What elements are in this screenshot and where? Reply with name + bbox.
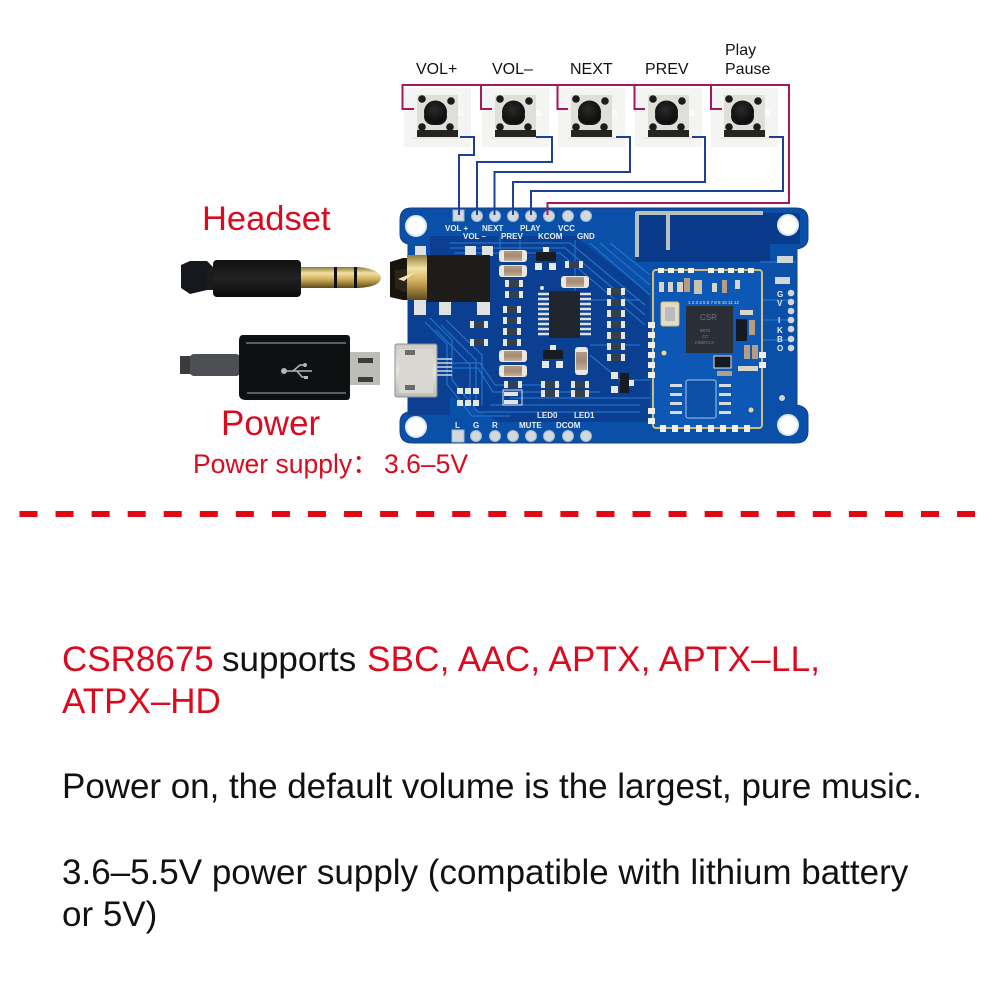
USB plug	[180, 335, 380, 400]
blue signal wires	[459, 137, 783, 215]
transistors	[535, 247, 634, 393]
silkscreen labels: NEXT	[482, 224, 503, 233]
silkscreen labels: LED1	[574, 411, 595, 420]
button label: NEXT: NEXT	[570, 61, 613, 78]
paragraph: codec support: supports	[222, 640, 356, 679]
paragraph: power range: or 5V)	[62, 895, 157, 934]
silkscreen labels: L	[455, 421, 460, 430]
red dashed divider	[20, 511, 976, 517]
paragraph: default volume: Power on, the default volume is the largest, pure music.	[62, 767, 922, 806]
right edge labels: V	[777, 299, 783, 308]
CSR chip: CC	[702, 334, 709, 339]
magenta common wiring	[402, 85, 789, 215]
headphone plug	[181, 260, 381, 297]
right edge labels	[777, 290, 783, 353]
silkscreen labels: G	[473, 421, 479, 430]
silkscreen labels: VOL –	[463, 232, 487, 241]
button label: Play Pause: Pause	[725, 61, 770, 78]
dark traces region	[430, 236, 650, 422]
silkscreen labels: LED0	[537, 411, 558, 420]
module edge pads	[648, 268, 766, 432]
silkscreen labels: GND	[577, 232, 595, 241]
crystal	[661, 302, 679, 326]
right edge pads	[775, 256, 794, 401]
amplifier IC	[538, 286, 591, 338]
silkscreen labels: DCOM	[556, 421, 581, 430]
paragraph: codec support	[62, 640, 820, 721]
paragraph: power range	[62, 853, 909, 934]
CSR chip: 8675	[700, 328, 711, 333]
paragraph: codec support: ATPX–HD	[62, 682, 221, 721]
audio jack	[390, 246, 493, 315]
silkscreen labels: R	[492, 421, 498, 430]
resistors	[470, 261, 625, 397]
power label: Power	[221, 404, 321, 443]
silkscreen labels: PLAY	[520, 224, 541, 233]
CSR chip: CSR	[700, 313, 717, 322]
right edge labels: K	[777, 326, 783, 335]
button label: Play Pause: Play	[725, 42, 756, 59]
silkscreen labels: VCC	[558, 224, 575, 233]
silkscreen labels: PREV	[501, 232, 523, 241]
CSR chip	[686, 306, 733, 353]
power supply note: Power supply：	[193, 449, 379, 479]
silkscreen labels: MUTE	[519, 421, 542, 430]
button label: VOL+: VOL+	[416, 61, 457, 78]
antenna	[636, 212, 763, 257]
silkscreen labels: KCOM	[538, 232, 563, 241]
button label: PREV: PREV	[645, 61, 689, 78]
silkscreen labels: VOL +	[445, 224, 469, 233]
silkscreen labels	[445, 224, 595, 430]
tactile buttons row	[404, 88, 778, 147]
right edge labels: I	[778, 316, 780, 325]
paragraph: power range: 3.6–5.5V power supply (compatible with lithium battery	[62, 853, 909, 892]
flash chip pads	[670, 384, 731, 414]
right edge labels: G	[777, 290, 783, 299]
bottom header pads	[452, 430, 592, 442]
CSR chip: K850V1X	[695, 340, 714, 345]
power supply note: 3.6–5V	[384, 449, 468, 479]
small parts near USB	[457, 388, 522, 406]
bluetooth module	[648, 268, 766, 432]
module top components	[659, 278, 758, 371]
micro USB socket	[395, 344, 452, 397]
paragraph: codec support: CSR8675	[62, 640, 214, 679]
right edge labels: B	[777, 335, 783, 344]
right edge labels: O	[777, 344, 783, 353]
top header pads	[453, 210, 592, 222]
USB symbol	[281, 363, 312, 379]
headset label: Headset	[202, 200, 331, 238]
PCB board	[390, 208, 808, 443]
button label: VOL-: VOL–	[492, 61, 533, 78]
mounting holes	[406, 215, 798, 437]
capacitors	[499, 250, 589, 377]
paragraph: codec support: SBC, AAC, APTX, APTX–LL,	[367, 640, 820, 679]
bluetooth module: 1 2 3 4 5 6 7 8 9 10 11 12	[688, 300, 739, 305]
